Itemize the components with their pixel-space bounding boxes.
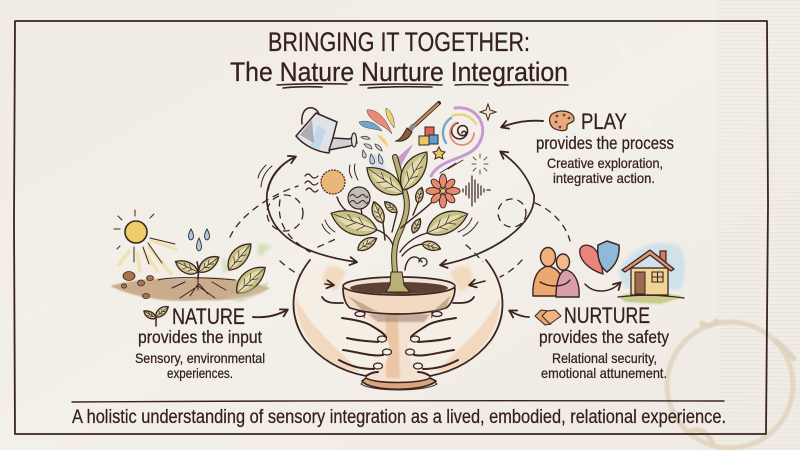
plant stem and branches (337, 157, 436, 290)
seedling (197, 262, 198, 279)
arrow: play to spiral (502, 121, 543, 127)
right hand (406, 262, 502, 376)
icon: grey wavy ball (348, 187, 370, 209)
sun (125, 221, 147, 243)
sunbeams (118, 240, 178, 275)
fingertips (355, 312, 442, 369)
nurture scene (533, 241, 685, 304)
paint splashes (359, 108, 413, 173)
arrow: safety to home (585, 283, 620, 291)
left hand (294, 262, 391, 376)
icon: colourful spiral (431, 108, 483, 176)
icon: sparkles (433, 104, 496, 174)
soil (110, 278, 270, 301)
arrow: dashed end right to pot (470, 281, 485, 285)
icon: sprout (142, 304, 170, 326)
icon: paint brush (396, 103, 439, 141)
plant leaves (327, 146, 471, 254)
coffee ring stain (667, 319, 795, 448)
text: play: integrative action. (553, 170, 655, 186)
shield (598, 241, 619, 272)
text: play: Creative exploration, (547, 155, 663, 171)
text: nurture (535, 303, 669, 381)
house (618, 243, 685, 304)
icon: wavy lines (305, 174, 318, 192)
falling leaf washes (222, 243, 272, 273)
text: play: PLAY (581, 109, 627, 134)
text: nature: experiences. (167, 365, 233, 381)
summary rule (72, 401, 724, 402)
icon: orange textured ball (321, 170, 345, 194)
text: play: provides the process (536, 133, 674, 153)
icon: flower (426, 174, 460, 208)
icon: handshake (535, 310, 561, 325)
rim (343, 288, 455, 314)
text: nurture: provides the safety (539, 327, 669, 347)
water splash wash (368, 154, 386, 172)
pot body (361, 312, 437, 390)
text: nature: Sensory, environmental (135, 350, 265, 366)
icon: watering can (296, 108, 357, 153)
text: nature: provides the input (138, 327, 262, 347)
falling leaves (222, 238, 256, 274)
icon: toy blocks (419, 127, 438, 145)
arrow: solid loop left (267, 157, 356, 262)
text: nature (135, 304, 265, 381)
title: The Nature Nurture Integration (230, 57, 568, 87)
arrow: to watering can (268, 157, 295, 190)
nature scene (110, 210, 272, 302)
icon: palette (550, 111, 574, 131)
icon: sound waves (463, 176, 490, 206)
text: nurture: NURTURE (564, 303, 650, 328)
text: play (536, 109, 674, 186)
title (230, 27, 568, 88)
heart (580, 245, 603, 274)
arrow: dashed end to pot (325, 284, 333, 285)
text: nature: NATURE (172, 304, 245, 329)
arrow: solid curve right to plant (441, 195, 534, 265)
motion ticks (258, 164, 478, 236)
arrow: solid loop right (501, 152, 534, 195)
arrow: nurture to hands (510, 311, 529, 317)
stones (122, 272, 154, 298)
text: nurture: emotional attunement. (541, 365, 667, 381)
hands cradling pot (294, 260, 502, 376)
rain drops (188, 229, 210, 251)
arrow: nature to hands (253, 310, 287, 317)
stem base (386, 272, 410, 292)
text: nurture: Relational security, (552, 350, 657, 366)
plant pot (343, 272, 455, 390)
title: BRINGING IT TOGETHER: (268, 27, 530, 57)
dashed flows (230, 186, 570, 285)
people (533, 248, 579, 297)
water drops (361, 136, 383, 164)
